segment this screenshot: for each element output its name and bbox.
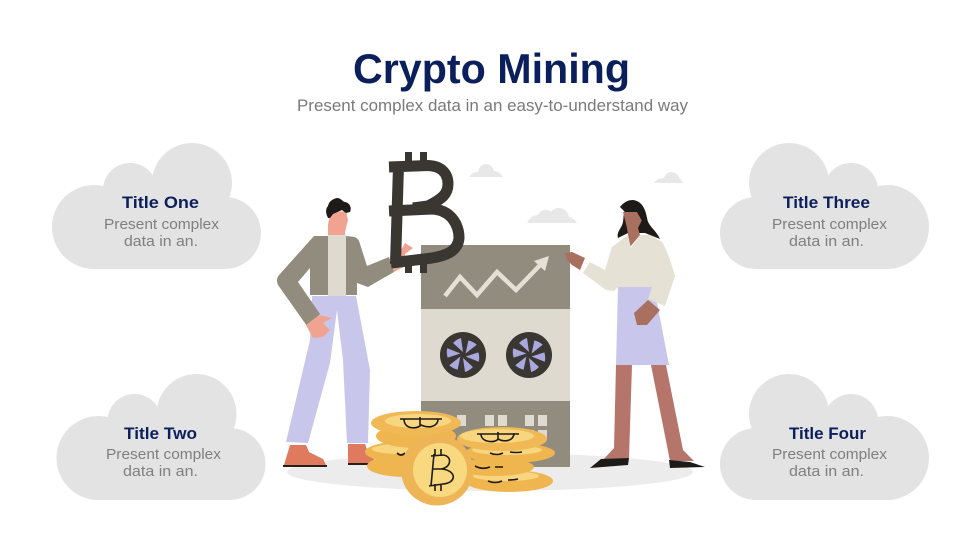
icon: right fan	[506, 332, 552, 378]
panel: title two cloud: Present complex	[106, 447, 222, 463]
panel: title four cloud	[720, 374, 929, 500]
legs	[602, 365, 632, 461]
vent slots	[457, 415, 547, 440]
chart: rising trend arrow	[445, 256, 549, 296]
icon: front bitcoin coin	[401, 434, 473, 506]
panel: title three cloud: Present complex	[772, 217, 888, 233]
hair	[326, 198, 351, 218]
icon: large bitcoin symbol	[389, 152, 459, 273]
icon: woman figure	[565, 200, 705, 468]
panel: title four cloud: Title Four	[789, 424, 866, 443]
coin mark	[477, 432, 519, 442]
icon: small background clouds	[469, 164, 683, 223]
skirt	[616, 287, 669, 365]
title: Crypto Mining	[353, 45, 630, 92]
icon: back coin stack	[365, 411, 461, 477]
jacket	[277, 236, 328, 326]
panel: title one cloud: Title One	[122, 193, 199, 212]
hair front	[620, 200, 648, 228]
hands	[306, 315, 332, 338]
panel: title two cloud: data in an.	[123, 464, 198, 480]
ground shadow	[287, 453, 693, 491]
panel: title two cloud	[56, 374, 266, 500]
panel: title four cloud: Present complex	[772, 447, 888, 463]
hair back	[618, 205, 660, 239]
hands	[565, 252, 585, 270]
subtitle: Present complex data in an easy-to-understand way	[297, 97, 689, 115]
icon: mining machine	[421, 245, 570, 467]
panel: title three cloud	[720, 143, 929, 269]
panel: title one cloud	[52, 143, 261, 269]
panel: title three cloud: Title Three	[783, 193, 870, 212]
panel: title two cloud: Title Two	[124, 424, 197, 443]
face and neck	[623, 212, 642, 247]
shoes	[590, 458, 629, 468]
shoes	[284, 445, 326, 465]
panel: title three cloud: data in an.	[789, 234, 864, 250]
panel: title one cloud: Present complex	[104, 217, 220, 233]
panel: title four cloud: data in an.	[789, 464, 864, 480]
coin mark	[397, 417, 442, 455]
neck and face	[328, 211, 348, 237]
icon: man figure	[277, 198, 413, 467]
panel: title one cloud: data in an.	[124, 234, 198, 250]
blouse	[583, 235, 675, 306]
icon: right coin stack	[456, 427, 555, 492]
icon: left fan	[440, 332, 486, 378]
trousers	[286, 296, 370, 443]
shirt	[328, 235, 346, 296]
